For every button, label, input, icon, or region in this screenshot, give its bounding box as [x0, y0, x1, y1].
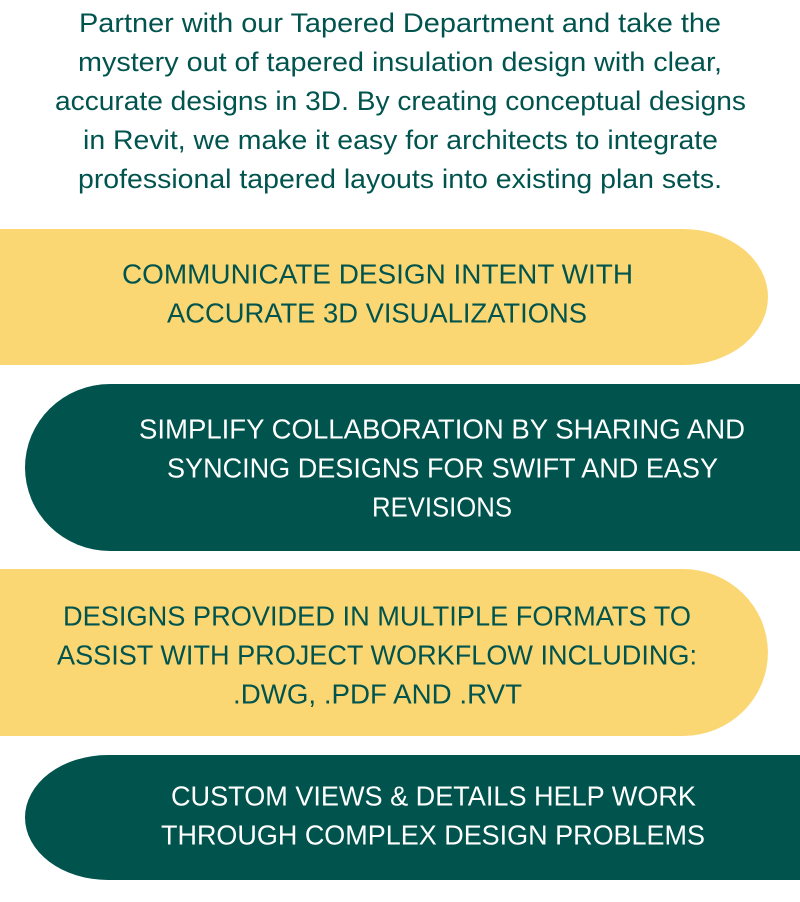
panel text: simplify collaboration [139, 414, 745, 522]
panel: multiple formats benefit [0, 569, 768, 736]
panel text: custom views and details: THROUGH COMPLEX DESIGN PROBLEMS [161, 820, 705, 850]
panel text: designs in multiple formats: DESIGNS PROVIDED IN MULTIPLE FORMATS TO [63, 600, 691, 632]
panel text: simplify collaboration: REVISIONS [372, 492, 512, 522]
panel text: communicate design intent: COMMUNICATE DESIGN INTENT WITH [122, 258, 633, 290]
intro paragraph: in Revit, we make it easy for architects to integrate [83, 125, 718, 155]
intro paragraph [55, 8, 746, 194]
panel text: designs in multiple formats: ASSIST WITH PROJECT WORKFLOW INCLUDING: [57, 640, 697, 670]
panel text: custom views and details [161, 780, 705, 850]
panel text: communicate design intent [122, 258, 633, 328]
panel: custom views benefit [25, 755, 800, 880]
panel: collaboration benefit [25, 384, 800, 551]
intro paragraph: professional tapered layouts into existing plan sets. [78, 164, 722, 194]
panel: 3D visualizations benefit [0, 229, 768, 365]
panel text: simplify collaboration: SIMPLIFY COLLABORATION BY SHARING AND [139, 414, 745, 444]
intro paragraph: mystery out of tapered insulation design with clear, [78, 47, 722, 77]
intro paragraph: Partner with our Tapered Department and take the [79, 8, 721, 38]
panel text: communicate design intent: ACCURATE 3D VISUALIZATIONS [167, 298, 587, 328]
intro paragraph: accurate designs in 3D. By creating conceptual designs [55, 86, 746, 116]
panel text: designs in multiple formats [57, 600, 697, 710]
panel text: custom views and details: CUSTOM VIEWS & DETAILS HELP WORK [171, 780, 696, 812]
panel text: designs in multiple formats: .DWG, .PDF AND .RVT [233, 678, 522, 710]
panel text: simplify collaboration: SYNCING DESIGNS FOR SWIFT AND EASY [167, 452, 718, 484]
